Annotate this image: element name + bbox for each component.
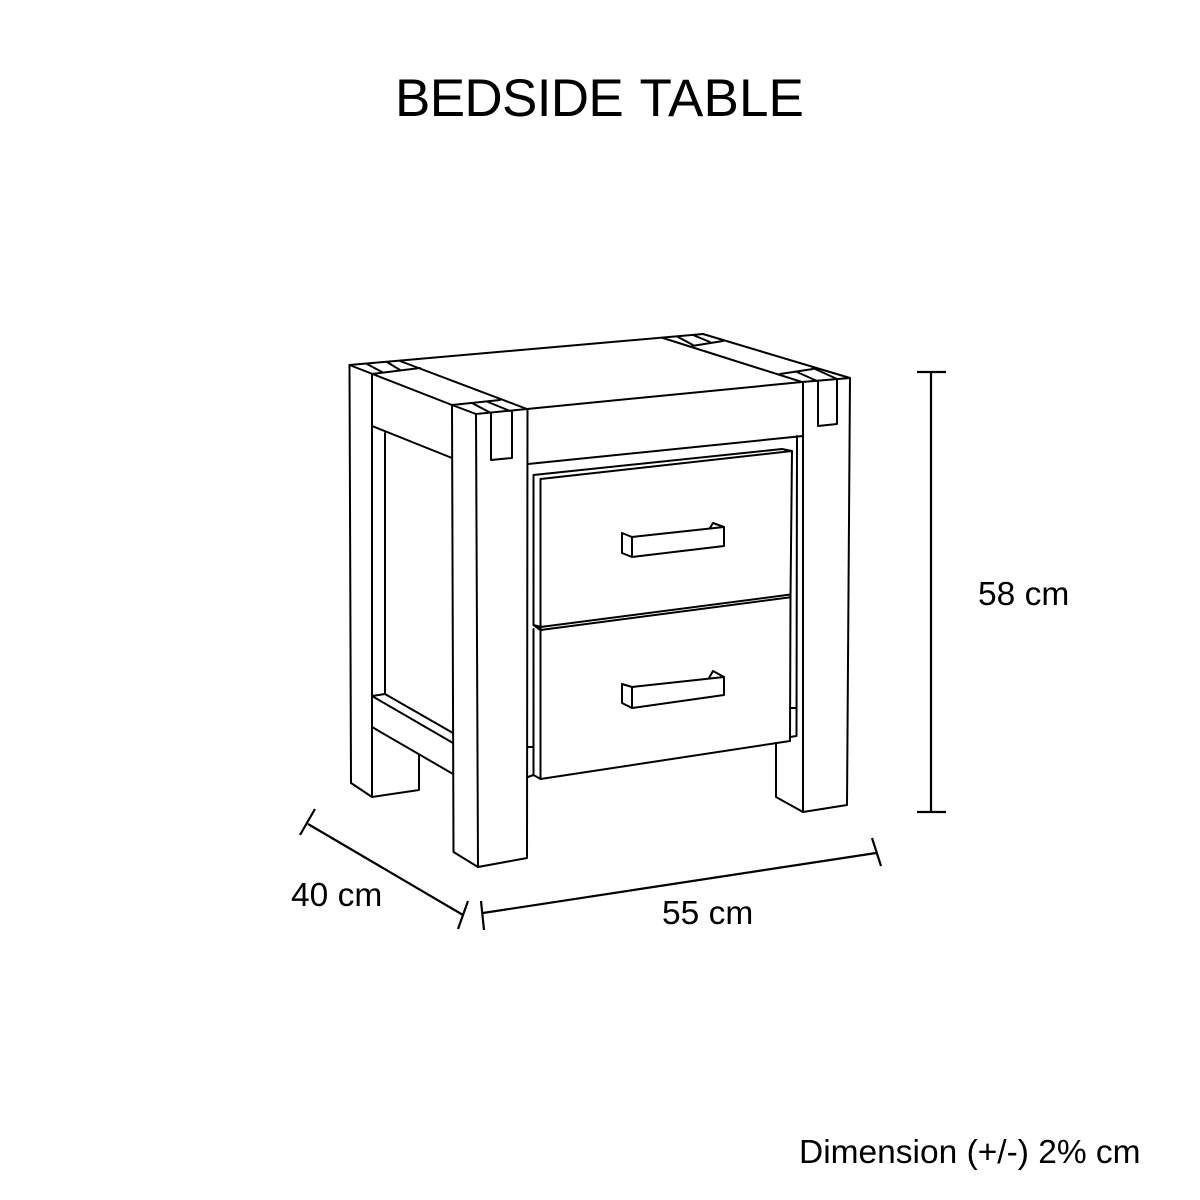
width label: 55 cm (662, 895, 753, 932)
front right leg (776, 378, 850, 812)
lower drawer handle (622, 671, 724, 708)
height label: 58 cm (978, 576, 1069, 613)
upper drawer handle (622, 523, 724, 557)
side rail and stretcher (372, 426, 453, 774)
depth label: 40 cm (291, 877, 382, 914)
tolerance note: Dimension (+/-) 2% cm (799, 1134, 1141, 1171)
upper drawer (534, 449, 792, 630)
lower drawer (528, 597, 796, 779)
height dimension line (917, 372, 946, 812)
table top with joints (350, 334, 850, 414)
bedside table line drawing (350, 334, 850, 867)
title: TABLE (640, 69, 804, 128)
front left leg (452, 405, 528, 867)
depth dimension line (300, 809, 468, 929)
title: BEDSIDE (395, 69, 623, 128)
width dimension line (481, 838, 881, 930)
back left leg (350, 365, 419, 797)
front apron (528, 436, 803, 737)
